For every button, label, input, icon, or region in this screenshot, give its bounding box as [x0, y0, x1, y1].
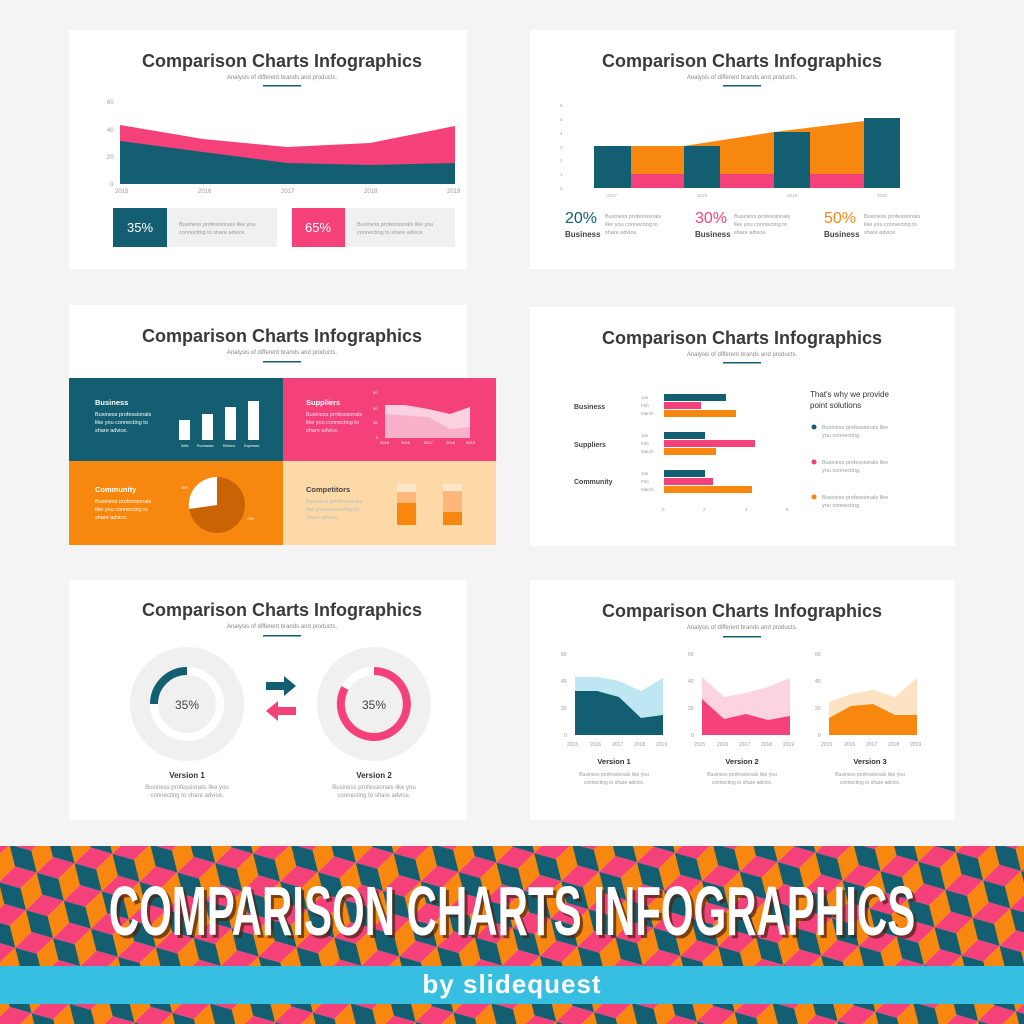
- chart: bars with area: 4: [560, 131, 563, 136]
- chart: version 1: 2019: [656, 742, 667, 748]
- quadrant: business: share advice.: [95, 428, 128, 434]
- panel: slide 3 quadrants: Analysis of different brands and products.: [227, 350, 337, 356]
- chart: version 1: 0: [564, 733, 567, 739]
- chart: bars with area: 5: [560, 117, 563, 122]
- chart: horizontal bars: March: [641, 487, 654, 492]
- quadrant: business: Business professionals: [95, 412, 152, 418]
- quadrant: suppliers: Business professionals: [306, 412, 363, 418]
- chart: version 3: [815, 652, 921, 786]
- chart: bars with area: 2017: [607, 193, 618, 198]
- panel: slide 3 quadrants: [69, 305, 496, 545]
- chart: version 1: 40: [561, 679, 567, 685]
- chart: donut version 2: connecting to share advice.: [337, 793, 411, 799]
- chart: donut version 2: Version 2: [356, 771, 392, 780]
- quadrant: suppliers: 2019: [466, 440, 476, 445]
- panel: slide 4 horizontal bars: [530, 307, 955, 546]
- chart: version 3: Version 3: [853, 757, 887, 766]
- chart: version 2: 2016: [717, 742, 728, 748]
- chart: version 3: connecting to share advice.: [840, 780, 900, 786]
- chart: version 3: 60: [815, 652, 821, 658]
- chart: horizontal bars: Feb: [641, 441, 649, 446]
- text block: point solutions legend: [810, 390, 889, 509]
- chart: version 1: 2018: [634, 742, 645, 748]
- heading: slide 3 title: Comparison Charts Infographics: [142, 326, 422, 346]
- chart: version 1: Version 1: [597, 757, 631, 766]
- quadrant: suppliers: 2018: [446, 440, 456, 445]
- chart: horizontal bars: Feb: [641, 403, 649, 408]
- chart: version 3: 20: [815, 706, 821, 712]
- stat: 20%: share advice.: [605, 230, 638, 236]
- quadrant: competitors: share advice.: [306, 515, 339, 521]
- chart: area chart: 40: [107, 128, 114, 134]
- chart: version 2: 20: [688, 706, 694, 712]
- panel: slide 1 area chart: [69, 30, 467, 269]
- quadrant: business: Business: [95, 398, 128, 407]
- quadrant: community: Community: [95, 485, 137, 494]
- heading: slide 5 title: Comparison Charts Infographics: [142, 600, 422, 620]
- quadrant: business: [69, 378, 283, 461]
- chart: horizontal bars: Suppliers: [574, 442, 606, 449]
- chart: horizontal bars: [574, 394, 789, 512]
- icon: exchange arrows: [266, 676, 296, 721]
- text block: point solutions legend: Business professionals like: [822, 425, 888, 431]
- chart: area chart: [107, 100, 461, 195]
- quadrant: suppliers: share advice.: [306, 428, 339, 434]
- heading: slide 6 title: Comparison Charts Infographics: [602, 601, 882, 621]
- chart: horizontal bars: 0: [662, 507, 665, 512]
- chart: version 2: connecting to share advice.: [712, 780, 772, 786]
- chart: version 3: 2016: [844, 742, 855, 748]
- chart: version 2: 40: [688, 679, 694, 685]
- callout: 35%: Business professionals like you: [179, 222, 255, 228]
- chart: version 2: 60: [688, 652, 694, 658]
- stat: 30%: [695, 210, 791, 239]
- callout: 35%: [113, 208, 277, 247]
- callout: 65%: Business professionals like you: [357, 222, 433, 228]
- chart: area chart: 2019: [447, 189, 461, 195]
- chart: horizontal bars: 2: [703, 507, 706, 512]
- stat: 50%: [824, 210, 921, 239]
- quadrant: business: Sells: [181, 444, 189, 448]
- chart: area chart: 2016: [198, 189, 212, 195]
- stat: 50%: Business professionals: [864, 214, 921, 220]
- chart: bars with area: 0: [560, 186, 563, 191]
- chart: area chart: 2017: [281, 189, 295, 195]
- chart: horizontal bars: Jan: [641, 471, 649, 476]
- quadrant: suppliers: 20: [373, 420, 378, 425]
- chart: version 3: 0: [818, 733, 821, 739]
- quadrant: competitors: Business professionals: [306, 499, 363, 505]
- chart: area chart: 2015: [115, 189, 129, 195]
- chart: area chart: 20: [107, 155, 114, 161]
- stat: 30%: like you connecting to: [734, 222, 787, 228]
- quadrant: community: share advice.: [95, 515, 128, 521]
- quadrant: business: like you connecting to: [95, 420, 148, 426]
- heading: banner title: COMPARISON CHARTS INFOGRAPHICS: [109, 873, 915, 951]
- chart: version 1: connecting to share advice.: [584, 780, 644, 786]
- chart: horizontal bars: 4: [745, 507, 748, 512]
- chart: horizontal bars: March: [641, 411, 654, 416]
- chart: version 2: Business professionals like you: [707, 772, 777, 778]
- stat: 30%: Business: [695, 230, 731, 239]
- stat: 50%: Business: [824, 230, 860, 239]
- stat: 20%: [565, 210, 662, 239]
- text block: point solutions legend: Business professionals like: [822, 460, 888, 466]
- text block: point solutions legend: point solutions: [810, 401, 861, 410]
- quadrant: business: Returns: [223, 444, 236, 448]
- chart: donut version 1: Business professionals like you: [145, 785, 229, 791]
- quadrant: community: like you connecting to: [95, 507, 148, 513]
- heading: banner title: COMPARISON CHARTS INFOGRAPHICS: [112, 876, 918, 954]
- chart: horizontal bars: March: [641, 449, 654, 454]
- chart: version 2: 0: [691, 733, 694, 739]
- heading: slide 2 title: Comparison Charts Infographics: [602, 51, 882, 71]
- callout: 65%: connecting to share advice.: [357, 230, 424, 236]
- stat: 20%: like you connecting to: [605, 222, 658, 228]
- stat: 30%: share advice.: [734, 230, 767, 236]
- panel: slide 4 horizontal bars: Analysis of different brands and products.: [687, 352, 797, 358]
- chart: donut version 1: [130, 647, 244, 799]
- callout: 35%: connecting to share advice.: [179, 230, 246, 236]
- quadrant: suppliers: like you connecting to: [306, 420, 359, 426]
- chart: version 1: Business professionals like you: [579, 772, 649, 778]
- stat: 20%: Business: [565, 230, 601, 239]
- callout: 65%: 65%: [305, 220, 331, 235]
- chart: donut version 1: 35%: [175, 698, 199, 712]
- quadrant: suppliers: 60: [373, 390, 378, 395]
- chart: horizontal bars: Business: [574, 404, 605, 411]
- chart: horizontal bars: Jan: [641, 433, 649, 438]
- chart: bars with area: 2018: [697, 193, 708, 198]
- chart: horizontal bars: 6: [786, 507, 789, 512]
- stat: 50%: like you connecting to: [864, 222, 917, 228]
- chart: bars with area: 3: [560, 145, 563, 150]
- chart: donut version 2: Business professionals like you: [332, 785, 416, 791]
- text block: point solutions legend: you connecting.: [822, 503, 861, 509]
- chart: bars with area: 6: [560, 103, 563, 108]
- panel: slide 1 area chart: Analysis of different brands and products.: [227, 75, 337, 81]
- quadrant: suppliers: Suppliers: [306, 398, 340, 407]
- quadrant: competitors: Competitors: [306, 485, 350, 494]
- heading: slide 1 title: Comparison Charts Infographics: [142, 51, 422, 71]
- quadrant: business: Expenses: [244, 444, 260, 448]
- callout: 35%: 35%: [127, 220, 153, 235]
- chart: bars with area: 2020: [877, 193, 888, 198]
- chart: horizontal bars: Jan: [641, 395, 649, 400]
- chart: version 2: [688, 652, 794, 786]
- quadrant: community: 30%: [181, 486, 188, 490]
- chart: version 3: 2015: [821, 742, 832, 748]
- chart: donut version 2: 35%: [362, 698, 386, 712]
- chart: version 3: 2019: [910, 742, 921, 748]
- chart: version 1: 20: [561, 706, 567, 712]
- stat: 20%: 20%: [565, 210, 597, 227]
- text block: point solutions legend: That's why we provide: [810, 390, 889, 399]
- quadrant: community: 70%: [247, 517, 254, 521]
- quadrant: suppliers: 2016: [401, 440, 411, 445]
- panel: slide 2 bar+area chart: [530, 30, 955, 269]
- chart: version 1: 2015: [567, 742, 578, 748]
- quadrant: suppliers: [283, 378, 496, 461]
- chart: area chart: 2018: [364, 189, 378, 195]
- chart: horizontal bars: Feb: [641, 479, 649, 484]
- quadrant: community: [69, 461, 283, 545]
- stat: 30%: Business professionals: [734, 214, 791, 220]
- chart: version 1: 60: [561, 652, 567, 658]
- chart: bars with area: 2019: [787, 193, 798, 198]
- chart: version 2: 2018: [761, 742, 772, 748]
- chart: version 1: 2016: [590, 742, 601, 748]
- chart: version 3: 2017: [866, 742, 877, 748]
- panel: slide 5 donuts: [69, 580, 467, 820]
- chart: version 1: [561, 652, 667, 786]
- chart: version 2: 2015: [694, 742, 705, 748]
- text block: point solutions legend: you connecting.: [822, 433, 861, 439]
- stat: 50%: 50%: [824, 210, 856, 227]
- chart: area chart: 60: [107, 100, 114, 106]
- panel: slide 2 bar+area chart: Analysis of different brands and products.: [687, 75, 797, 81]
- panel: slide 6 three area charts: [530, 580, 955, 820]
- quadrant: competitors: like you connecting to: [306, 507, 359, 513]
- stat: 50%: share advice.: [864, 230, 897, 236]
- chart: version 3: Business professionals like you: [835, 772, 905, 778]
- text block: point solutions legend: you connecting.: [822, 468, 861, 474]
- chart: donut version 1: Version 1: [169, 771, 205, 780]
- quadrant: suppliers: 2015: [380, 440, 390, 445]
- chart: donut version 2: [317, 647, 431, 799]
- band: by slidequest: [0, 966, 1024, 1004]
- quadrant: competitors: [283, 461, 496, 545]
- banner: patterned footer: by slidequest: [422, 969, 602, 999]
- quadrant: suppliers: 40: [373, 406, 378, 411]
- chart: donut version 1: connecting to share advice.: [150, 793, 224, 799]
- quadrant: suppliers: 2017: [424, 440, 434, 445]
- text block: point solutions legend: Business professionals like: [822, 495, 888, 501]
- chart: version 3: 40: [815, 679, 821, 685]
- chart: bars with area: 2: [560, 158, 563, 163]
- chart: version 1: 2017: [612, 742, 623, 748]
- chart: area chart: 0: [110, 182, 114, 188]
- chart: bars with area: [560, 103, 900, 198]
- quadrant: business: Purchases: [197, 444, 214, 448]
- heading: slide 4 title: Comparison Charts Infographics: [602, 328, 882, 348]
- chart: version 2: 2017: [739, 742, 750, 748]
- stat: 30%: 30%: [695, 210, 727, 227]
- banner: patterned footer: [0, 846, 1024, 1024]
- callout: 65%: [292, 208, 455, 247]
- chart: version 3: 2018: [888, 742, 899, 748]
- panel: slide 5 donuts: Analysis of different brands and products.: [227, 624, 337, 630]
- chart: horizontal bars: Community: [574, 479, 613, 486]
- panel: slide 6 three area charts: Analysis of different brands and products.: [687, 625, 797, 631]
- chart: version 2: Version 2: [725, 757, 759, 766]
- chart: bars with area: 1: [560, 172, 563, 177]
- quadrant: community: Business professionals: [95, 499, 152, 505]
- stat: 20%: Business professionals: [605, 214, 662, 220]
- chart: version 2: 2019: [783, 742, 794, 748]
- quadrant: suppliers: 0: [376, 435, 379, 440]
